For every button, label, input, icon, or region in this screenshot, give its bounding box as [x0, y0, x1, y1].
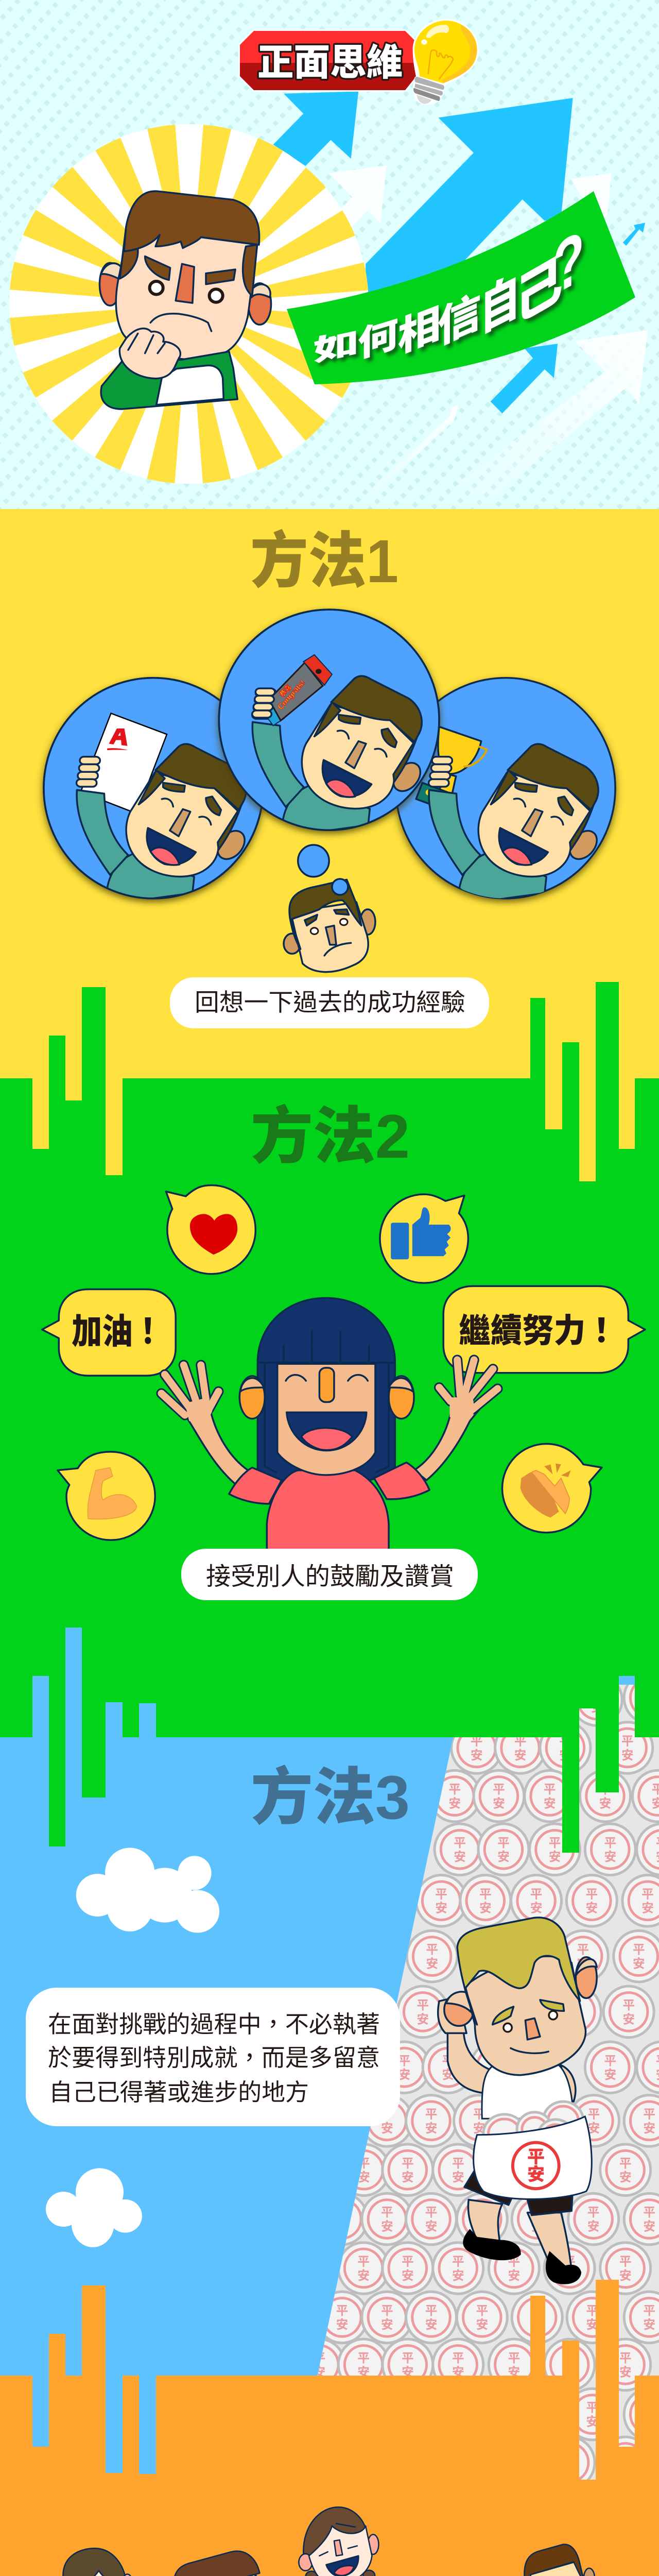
coin wall pattern: 安	[314, 2365, 325, 2379]
badge: positive thinking: 正面思維	[257, 42, 403, 83]
girl left	[59, 2548, 135, 2576]
coin wall pattern: 平	[448, 1783, 461, 1797]
coin wall pattern: 安	[448, 1797, 461, 1811]
coin wall pattern: 安	[479, 1902, 492, 1916]
panel: hero arrows	[273, 91, 648, 506]
bubble: encouragement right	[443, 1286, 645, 1373]
coin wall pattern: 安	[497, 1850, 510, 1864]
coin wall pattern: 安	[619, 2365, 631, 2379]
coin wall pattern: 安	[531, 2318, 543, 2332]
coin wall pattern: 安	[604, 2068, 616, 2082]
coin wall pattern: 平	[563, 2351, 576, 2365]
coin wall pattern: 平	[471, 1734, 483, 1748]
body text: method 3	[48, 2011, 380, 2106]
title: how to trust yourself	[313, 214, 584, 368]
yellow drips into green	[32, 1078, 635, 1181]
coin wall pattern: 安	[402, 2171, 414, 2184]
coin wall pattern: 平	[619, 2351, 631, 2365]
coin wall pattern: 平	[530, 1887, 542, 1901]
coin wall pattern: 安	[643, 2219, 655, 2234]
coin wall pattern: 平	[358, 2157, 370, 2171]
coin wall pattern: 平	[490, 2054, 502, 2068]
panel: method 3 artwork	[46, 1848, 597, 2284]
coin wall pattern: 平	[417, 1998, 429, 2012]
coin wall pattern: 安	[599, 1797, 611, 1811]
coin wall pattern: 安	[619, 2269, 631, 2283]
coin wall pattern: 平	[599, 1783, 611, 1797]
coin wall pattern: 安	[425, 2219, 437, 2234]
coin wall pattern: 平	[398, 2054, 410, 2068]
apron stamp text: 安	[527, 2164, 545, 2184]
coin wall pattern: 平	[357, 2351, 370, 2365]
dotted background pattern	[0, 0, 659, 510]
coin wall pattern: 安	[549, 1850, 561, 1864]
coin wall pattern: 平	[604, 1836, 616, 1850]
panel: method 1 circles	[44, 609, 615, 972]
girl with braids	[294, 2507, 381, 2576]
coin wall pattern: 平	[381, 2304, 393, 2318]
heading: method 1: 方法1	[250, 528, 398, 596]
coin wall pattern: 平	[314, 2351, 325, 2365]
coin wall pattern: 安	[619, 2171, 631, 2184]
coin wall pattern: 安	[473, 2122, 485, 2136]
heading: method 2: 方法2	[251, 1102, 410, 1171]
coin wall pattern: 平	[569, 1998, 582, 2012]
coin wall pattern: 平	[619, 2449, 631, 2463]
coin wall pattern: 安	[490, 2068, 502, 2082]
coin wall pattern: 安	[604, 1850, 616, 1864]
coin wall pattern: 平	[402, 2255, 414, 2269]
sunburst circle	[9, 124, 369, 484]
coin wall pattern: 平	[452, 2255, 464, 2269]
cloud lower	[46, 2168, 142, 2247]
title: how to trust yourself: 如	[313, 326, 359, 368]
arrow: white fading thin	[357, 405, 459, 506]
hero background	[0, 0, 659, 510]
orange rising bars	[49, 2280, 619, 2376]
coin wall pattern: 安	[633, 1957, 645, 1971]
coin wall pattern: 平	[563, 2449, 576, 2463]
coin wall pattern	[294, 1672, 659, 2488]
coin wall pattern: 平	[531, 2206, 543, 2219]
coin wall pattern: 平	[425, 2206, 437, 2219]
coin wall pattern: 平	[622, 1998, 635, 2012]
coin wall pattern: 平	[549, 1836, 561, 1850]
coin wall pattern: 安	[336, 2219, 348, 2234]
coin wall pattern: 安	[643, 1699, 655, 1713]
thought bubble large	[298, 845, 329, 877]
coin wall pattern: 安	[577, 1957, 589, 1971]
coin wall pattern: 安	[508, 2365, 520, 2379]
coin wall pattern: 平	[381, 2107, 393, 2121]
coin wall pattern: 安	[425, 2122, 437, 2136]
coin wall pattern: 平	[426, 1943, 438, 1957]
coin wall pattern: 平	[591, 1686, 603, 1701]
green ribbon banner	[287, 191, 635, 384]
coin wall pattern: 平	[604, 2054, 616, 2068]
coin wall pattern: 安	[569, 2012, 582, 2026]
coin wall pattern: 平	[587, 2206, 599, 2219]
coin wall pattern: 安	[452, 2269, 464, 2283]
boy right	[518, 2545, 597, 2576]
coin wall pattern: 平	[402, 2157, 414, 2171]
coin wall pattern: 安	[544, 1797, 556, 1811]
caption pill: method 1	[170, 977, 489, 1028]
middle circle with game console	[219, 609, 439, 834]
coin wall pattern: 安	[452, 2365, 464, 2379]
coin wall pattern: 平	[508, 2351, 520, 2365]
coin wall pattern: 平	[402, 2351, 414, 2365]
body text: method 3: 自己已得著或進步的地方	[49, 2079, 309, 2106]
section background: green with rising bars	[0, 982, 659, 1738]
title: how to trust yourself: 自	[480, 265, 521, 343]
coin wall pattern: 安	[381, 2219, 393, 2234]
coin wall pattern: 安	[531, 2219, 543, 2234]
title: how to trust yourself: 相	[398, 300, 441, 362]
coin wall pattern: 安	[563, 2463, 576, 2477]
coin wall pattern: 平	[493, 1783, 505, 1797]
arrow: small blue top	[273, 91, 358, 166]
coin wall pattern: 平	[454, 1836, 466, 1850]
coin wall pattern: 平	[633, 1943, 645, 1957]
left circle with test paper	[44, 678, 263, 902]
coin wall pattern: 平	[442, 2054, 454, 2068]
coin wall pattern: 安	[336, 2318, 348, 2332]
coin wall pattern: 平	[619, 2157, 631, 2171]
coin wall pattern: 安	[417, 2012, 429, 2026]
coin wall pattern: 安	[358, 2171, 370, 2184]
arrow: white faded upper	[329, 165, 387, 230]
green drips into section 3	[49, 1737, 619, 1853]
coin wall pattern: 平	[559, 1734, 571, 1748]
coin wall pattern: 安	[402, 2269, 414, 2283]
caption: recall past successes: 回想一下過去的成功經驗	[195, 989, 465, 1016]
panel: method 2 artwork	[42, 1185, 645, 1553]
coin wall pattern: 安	[563, 2269, 576, 2283]
badge: positive thinking	[238, 29, 420, 92]
coin wall pattern: 安	[508, 2269, 520, 2283]
arrow: white fading lower right	[429, 330, 648, 506]
coin wall pattern: 平	[476, 2304, 488, 2318]
coin wall pattern: 安	[476, 2318, 488, 2332]
cloud upper	[76, 1848, 219, 1933]
console screen text: 恭喜	[278, 683, 293, 699]
heading: method 3: 方法3	[251, 1763, 410, 1832]
coin wall pattern: 安	[425, 2318, 437, 2332]
apron stamp text: 平	[527, 2147, 545, 2167]
caption pill: method 2	[181, 1549, 478, 1600]
coin wall pattern: 平	[643, 1684, 655, 1698]
arrow: white right	[571, 173, 612, 217]
right circle base	[396, 678, 615, 899]
coin wall pattern: 平	[476, 2206, 488, 2219]
coin wall pattern: 平	[544, 1783, 556, 1797]
coin wall pattern: 平	[586, 2304, 598, 2318]
console screen text: Congrats!	[276, 679, 307, 711]
coin wall pattern: 安	[454, 1850, 466, 1864]
coin wall pattern: 安	[398, 2068, 410, 2082]
coin wall pattern: 安	[586, 2415, 598, 2429]
coin wall pattern: 平	[641, 1887, 654, 1901]
coin wall pattern: 平	[336, 2304, 348, 2318]
arrow: big blue	[366, 98, 573, 296]
coin wall pattern: 平	[588, 2107, 600, 2121]
coin wall pattern: 平	[452, 2351, 464, 2365]
coin wall pattern: 安	[471, 1749, 483, 1762]
coin wall pattern: 安	[493, 1797, 505, 1811]
coin wall pattern: 安	[563, 2365, 576, 2379]
label: add oil: 加油！	[72, 1312, 163, 1351]
coin wall pattern: 平	[479, 1887, 492, 1901]
title: how to trust yourself: ?	[553, 214, 584, 311]
thought bubble small	[332, 879, 348, 895]
coin wall pattern: 安	[435, 1902, 447, 1916]
thinking man	[99, 191, 271, 409]
coin wall pattern: 安	[426, 1957, 438, 1971]
bubble: clapping	[502, 1444, 602, 1533]
coin wall pattern: 平	[643, 2401, 655, 2415]
coin wall pattern: 安	[357, 2365, 370, 2379]
coin wall pattern: 平	[452, 2157, 464, 2171]
panel: people group	[59, 2507, 597, 2576]
coin wall pattern: 安	[588, 2122, 600, 2136]
bubble: muscle	[58, 1452, 155, 1540]
coin wall pattern: 安	[381, 2318, 393, 2332]
coin wall pattern: 安	[643, 2122, 655, 2136]
coin wall pattern: 平	[586, 1887, 598, 1901]
coin wall pattern: 安	[587, 2219, 599, 2234]
bubble: encouragement left	[42, 1290, 176, 1376]
coin wall pattern: 安	[357, 2269, 370, 2283]
coin wall pattern: 安	[619, 2463, 631, 2477]
body text: method 3: 在面對挑戰的過程中，不必執著	[48, 2011, 380, 2038]
section background: orange	[0, 2376, 659, 2576]
coin wall pattern: 平	[514, 1734, 526, 1748]
icon: light bulb	[413, 19, 479, 105]
apron stamp text	[527, 2147, 545, 2184]
coin wall pattern: 平	[643, 2107, 655, 2121]
coin wall pattern: 安	[530, 1902, 542, 1916]
small thinking man	[284, 879, 375, 972]
coin wall pattern: 平	[619, 2255, 631, 2269]
coin wall pattern: 平	[336, 2206, 348, 2219]
label: keep going: 繼續努力！	[459, 1312, 617, 1349]
right man with trophy	[416, 727, 602, 902]
coin wall pattern: 平	[435, 1887, 447, 1901]
coin wall pattern: 安	[452, 2171, 464, 2184]
coin wall pattern: 平	[643, 2206, 655, 2219]
section 3 background with blue sky and coin wall	[0, 1623, 659, 2488]
coin wall pattern: 安	[586, 2318, 598, 2332]
coin wall pattern: 平	[381, 2206, 393, 2219]
coin wall pattern: 平	[586, 2401, 598, 2415]
title: how to trust yourself: 己	[515, 247, 563, 334]
coin wall pattern: 安	[643, 2415, 655, 2429]
coin wall pattern: 安	[514, 1749, 526, 1762]
arrow: blue lower	[491, 344, 558, 413]
coin wall pattern: 安	[622, 2012, 635, 2026]
man carrying coins	[438, 1918, 597, 2284]
coin wall pattern: 平	[425, 2304, 437, 2318]
coin wall pattern: 安	[476, 2219, 488, 2234]
coin wall pattern: 平	[563, 2255, 576, 2269]
coin wall pattern: 安	[641, 1902, 654, 1916]
coin wall pattern: 平	[473, 2107, 485, 2121]
section backgrounds: yellow	[0, 509, 659, 1079]
bubble: heart	[166, 1185, 255, 1274]
coin wall pattern: 平	[425, 2107, 437, 2121]
big man	[153, 2551, 294, 2576]
coin wall pattern: 安	[381, 2122, 393, 2136]
coin wall pattern: 平	[357, 2255, 370, 2269]
coin wall pattern: 平	[508, 2255, 520, 2269]
coin wall pattern: 安	[559, 1749, 571, 1762]
coin wall pattern: 安	[643, 2318, 655, 2332]
coin wall pattern: 安	[402, 2365, 414, 2379]
coin wall pattern: 平	[531, 2304, 543, 2318]
coin wall pattern: 安	[442, 2068, 454, 2082]
coin wall pattern: 平	[497, 1836, 510, 1850]
coin wall pattern: 平	[643, 2304, 655, 2318]
text panel: method 3	[26, 1988, 400, 2126]
girl cheering	[161, 1298, 497, 1553]
coin wall pattern: 平	[621, 1734, 634, 1748]
caption: accept praise: 接受別人的鼓勵及讚賞	[206, 1563, 454, 1590]
coin wall pattern: 安	[591, 1701, 603, 1715]
arrow: small blue right	[623, 223, 645, 246]
coin wall pattern: 安	[586, 1902, 598, 1916]
body text: method 3: 於要得到特別成就，而是多留意	[48, 2044, 380, 2071]
coin wall pattern: 安	[621, 1749, 634, 1762]
title: how to trust yourself: 何	[358, 314, 398, 365]
bubble: thumbs up	[380, 1194, 468, 1283]
title: how to trust yourself: 信	[438, 286, 481, 354]
coin wall pattern: 平	[577, 1943, 589, 1957]
